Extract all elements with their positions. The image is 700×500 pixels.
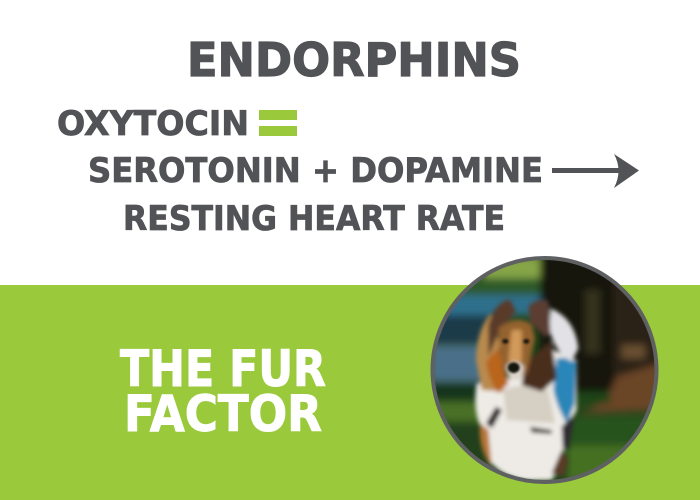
- heading: the fur factor: FACTOR: [124, 385, 322, 443]
- heading: the fur factor: THE FUR: [120, 340, 326, 398]
- dog neck fur: [522, 340, 557, 392]
- title: ENDORPHINS: [187, 33, 521, 87]
- dog head: [498, 320, 535, 380]
- heading: the fur factor: [120, 340, 326, 443]
- green panel: [0, 285, 700, 500]
- dog ears: [488, 299, 516, 357]
- dog body: [475, 350, 577, 481]
- text: serotonin + dopamine: SEROTONIN + DOPAMINE: [88, 151, 543, 191]
- photo: collie dog in circle: [430, 256, 658, 484]
- dog left mane: [476, 313, 505, 392]
- text: resting heart rate: RESTING HEART RATE: [123, 199, 505, 239]
- arrow: [552, 154, 639, 188]
- dog face: [502, 339, 529, 373]
- text: oxytocin: OXYTOCIN: [57, 104, 249, 144]
- icon: equals sign: [259, 110, 297, 136]
